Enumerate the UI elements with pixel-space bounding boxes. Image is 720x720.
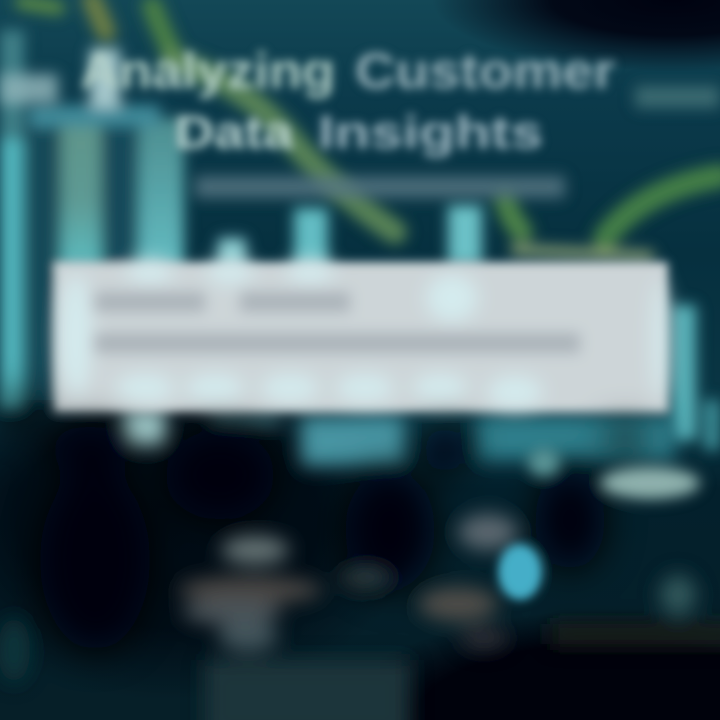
title: Insights [318, 106, 543, 158]
title: Analyzing [80, 43, 335, 99]
audience silhouettes [0, 396, 641, 650]
title [80, 43, 615, 158]
card text [95, 292, 580, 353]
card highlights [60, 260, 668, 408]
title: Data [175, 106, 293, 158]
icon: blue glow [498, 544, 542, 600]
panel: text card [54, 260, 668, 412]
line chart: green trend line [22, 0, 720, 256]
bar chart: teal vertical bars [0, 30, 720, 466]
callout: pale label [528, 449, 700, 499]
subtitle [0, 74, 720, 198]
title: Customer [355, 43, 615, 99]
lower glows [0, 449, 720, 720]
teal blocks below card [122, 410, 675, 466]
